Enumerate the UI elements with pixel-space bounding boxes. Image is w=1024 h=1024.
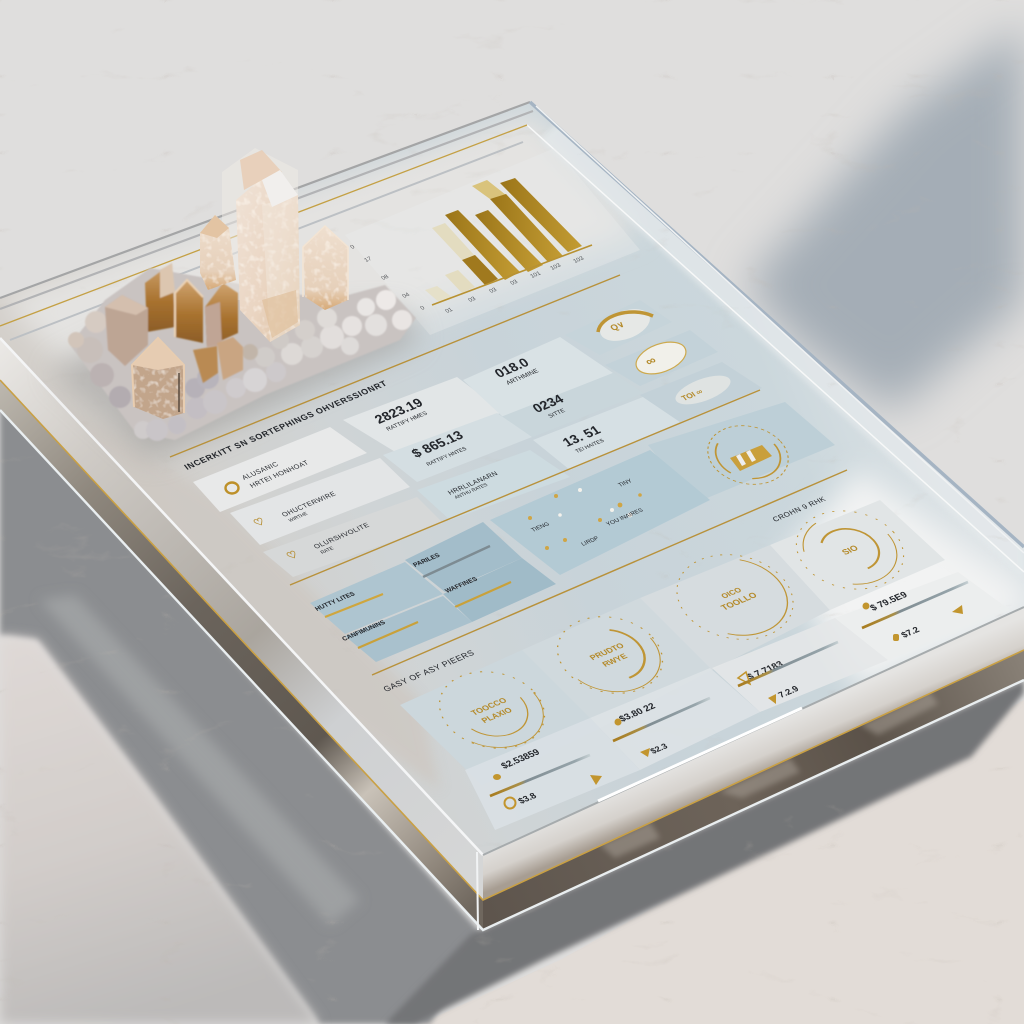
chart labels: 03 xyxy=(510,279,520,287)
chart labels: 08 xyxy=(381,274,391,282)
chart labels: 03 xyxy=(489,287,499,295)
chart labels: 0 xyxy=(350,244,357,251)
gauge panel 1: PLAXIO xyxy=(479,705,515,725)
stat card 1: $2.53859 xyxy=(499,747,542,771)
value card 0234 xyxy=(498,373,643,437)
chart bars xyxy=(425,178,582,303)
sparkle panel: TIENG xyxy=(531,522,551,534)
section heading: INCERKITT SN SORTEPHINGS OHVERSSIONRT xyxy=(182,378,389,472)
value card $865.13: $ 865.13 xyxy=(409,428,466,460)
stat card 2 xyxy=(590,668,760,770)
crystal right small xyxy=(303,226,348,310)
stat card 4: $7.2 xyxy=(899,625,921,640)
list card 2: OHUCTERWIRE xyxy=(281,491,338,519)
gauge panel 2 xyxy=(522,598,712,728)
gauge panel 4 xyxy=(770,497,945,610)
list card 1: HRTEI HONHOAT xyxy=(249,460,311,490)
chart labels: 0 xyxy=(420,305,427,312)
list card 3 xyxy=(263,497,443,577)
bottom left light wedge xyxy=(0,636,320,1024)
slab top face xyxy=(0,102,1024,855)
metric card canfimunins xyxy=(341,596,472,662)
chart labels: 103 xyxy=(573,256,586,265)
stat card 2: $2.3 xyxy=(648,741,670,756)
value card 13.51: 13. 51 xyxy=(560,423,604,449)
crystal shadow xyxy=(50,310,420,460)
metric card marileS: PARILES xyxy=(412,552,442,569)
gauge panel 3: OICO xyxy=(719,586,744,600)
metric card hutty lites xyxy=(310,562,443,634)
lower section labels xyxy=(381,495,828,694)
frost overlays xyxy=(9,108,1023,782)
text card xyxy=(417,450,570,520)
gauge panel 4: SIO xyxy=(840,543,860,557)
blue metric cards xyxy=(310,522,556,662)
lower left shadow xyxy=(0,400,483,1024)
value card 018.0 xyxy=(463,337,613,417)
lower section labels: CROHN 9 RHK xyxy=(771,495,828,524)
stat strips xyxy=(465,572,1010,830)
gold divider 2 xyxy=(170,275,620,457)
icon: gold heart: ♡ xyxy=(251,516,268,529)
crystal back ghost xyxy=(222,148,298,300)
value card 2823.19: RATTIFY HMES xyxy=(386,411,429,433)
list card 3: OLURSHVOLITE xyxy=(313,522,371,551)
icon: gold heart small: ♡ xyxy=(284,549,301,562)
front edge highlight xyxy=(598,708,802,801)
smoky patches xyxy=(600,692,938,858)
chart labels: 101 xyxy=(530,271,543,280)
crystal left small xyxy=(200,215,236,290)
lower section labels: GASY OF ASY PIEERS xyxy=(381,648,476,694)
sparkle panel: YOU INAIRES xyxy=(606,508,645,528)
gauge panel 3 xyxy=(640,540,830,670)
value card 13.51 xyxy=(533,397,680,470)
gauge card 3: TOI ∞ xyxy=(680,387,705,403)
stat card 3: 7.2.9 xyxy=(776,684,801,700)
gauge card 1 xyxy=(565,300,672,355)
stat card 2: $3.80 22 xyxy=(617,701,658,724)
chart labels: 04 xyxy=(402,292,412,300)
gold divider 4 xyxy=(372,470,847,675)
list card 3: RATE xyxy=(320,546,336,556)
value card 018.0: 018.0 xyxy=(492,355,532,380)
slab left side upper xyxy=(0,338,483,900)
slab left side lower xyxy=(0,380,483,930)
left list cards xyxy=(193,427,443,577)
chart labels: 03 xyxy=(468,296,478,304)
shadow light strip xyxy=(40,595,360,925)
slab right side lower xyxy=(483,650,1024,930)
building gauge panel xyxy=(648,402,835,503)
stat card 1: $3.8 xyxy=(516,791,538,806)
metric card hutty lites: HUTTY LITES xyxy=(314,591,357,613)
amber crystals xyxy=(105,263,243,383)
gauge card 3 xyxy=(640,362,762,422)
value cards xyxy=(343,337,680,520)
gauge panels row xyxy=(400,497,945,785)
sparkle panel: TINY xyxy=(618,479,634,489)
chart labels xyxy=(350,244,586,315)
icon: gold building xyxy=(730,445,772,471)
chart labels: 17 xyxy=(364,256,374,264)
slab right side upper xyxy=(483,607,1024,900)
value card 0234: 0234 xyxy=(530,392,567,415)
gauge panel 3: TOOLLO xyxy=(719,590,759,612)
lower right shadow xyxy=(385,680,1024,1024)
icon: gold coin xyxy=(226,482,238,494)
slab gold edge xyxy=(0,380,1024,900)
gauge card 2 xyxy=(605,330,718,386)
gauge panel 1 xyxy=(400,650,600,785)
crystal tall xyxy=(236,150,300,342)
bottom right warm marble xyxy=(420,700,1024,1024)
metric card waffines: WAFFINES xyxy=(444,576,480,595)
crystal cluster xyxy=(50,148,420,460)
stat card 4: $ 79.5E9 xyxy=(868,590,910,613)
value card 018.0: ARTHMINE xyxy=(505,368,541,387)
value card $865.13: RATTIFY HNTES xyxy=(426,446,469,468)
stat card 1 xyxy=(465,718,640,830)
top gold line xyxy=(0,125,527,326)
stat card 3 xyxy=(712,618,888,712)
bar chart xyxy=(345,148,640,335)
metric card canfimunins: CANFIMUNINS xyxy=(341,619,388,643)
text card: HRRLILANARN xyxy=(447,471,500,497)
list card 2: WIRTHE xyxy=(288,511,310,524)
chart panel xyxy=(345,148,640,335)
chart labels: 01 xyxy=(445,307,455,315)
crystal granular base xyxy=(68,268,416,441)
gauge panel 2: PRUDTO xyxy=(587,641,627,662)
metric card marileS xyxy=(405,522,522,592)
value card $865.13 xyxy=(383,413,532,482)
value card 0234: SITTE xyxy=(548,408,567,420)
list card 1: ALUSANIC xyxy=(241,461,280,482)
list card 1 xyxy=(193,427,367,512)
gauge card 2: ∞ xyxy=(642,353,659,368)
stat card 3: $ 7.7183 xyxy=(745,659,786,682)
chart labels: 103 xyxy=(550,263,563,272)
stat card 4 xyxy=(835,572,1010,660)
gauge card 1: Q∨ xyxy=(608,319,627,333)
gauge panel 1: TOOCCO xyxy=(469,695,509,717)
gauge panel 2: RWYE xyxy=(600,651,630,668)
chart axis xyxy=(432,245,592,305)
value card 2823.19 xyxy=(343,377,503,453)
slab lower highlights xyxy=(0,410,1024,930)
list card 2 xyxy=(230,458,410,545)
top right gauge cards xyxy=(565,300,762,422)
gold divider 3 xyxy=(290,390,760,585)
value card 2823.19: 2823.19 xyxy=(372,396,426,426)
metric card waffines xyxy=(443,558,556,622)
sparkle panel: LIRDP xyxy=(581,536,600,548)
upper right shadow xyxy=(745,25,1024,412)
crystal front xyxy=(132,338,184,419)
sparkle panel xyxy=(490,450,710,575)
text card: ANTHU RATES xyxy=(454,482,490,501)
value card 13.51: TEI HAITES xyxy=(575,438,606,455)
